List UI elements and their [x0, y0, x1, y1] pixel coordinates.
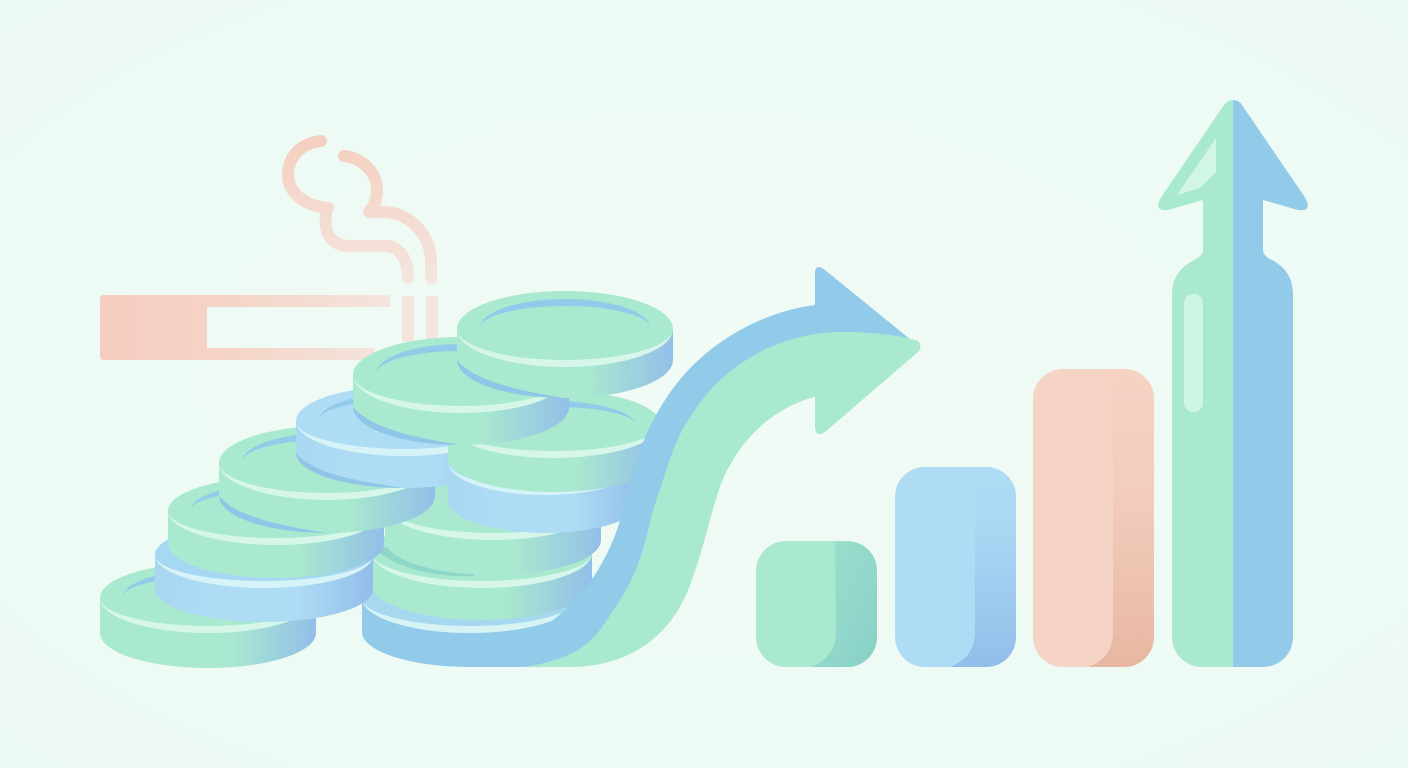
coin: green behind upper stack — [448, 390, 660, 492]
coin: right stack second — [372, 518, 592, 620]
bar 2 — [895, 467, 1016, 667]
coin: blue second left — [155, 522, 373, 622]
bar chart: rising bars — [756, 100, 1308, 667]
bar 3 — [1033, 369, 1154, 667]
arrow: curved growth arrow — [470, 267, 920, 667]
coin: right stack third — [385, 470, 601, 575]
coin: right stack bottom — [362, 563, 578, 667]
coin: blue behind upper stack — [448, 429, 642, 533]
shadow: upper coin on second coin — [374, 545, 475, 576]
coin: top green — [457, 291, 673, 398]
highlight: arrow shaft — [1184, 294, 1203, 412]
coin stacks — [100, 291, 673, 668]
bar 4: arrow bar — [1158, 100, 1308, 667]
coin: bottom left — [100, 563, 316, 668]
coin: blue fifth — [296, 386, 512, 488]
coin: green sixth — [353, 337, 569, 445]
bar 1 — [756, 541, 877, 667]
coin: green third left — [168, 477, 384, 578]
highlight: arrow head — [1177, 138, 1216, 195]
coin: green fourth left — [219, 426, 435, 533]
icon: cigarette — [100, 295, 438, 360]
icon: smoke — [288, 141, 431, 278]
